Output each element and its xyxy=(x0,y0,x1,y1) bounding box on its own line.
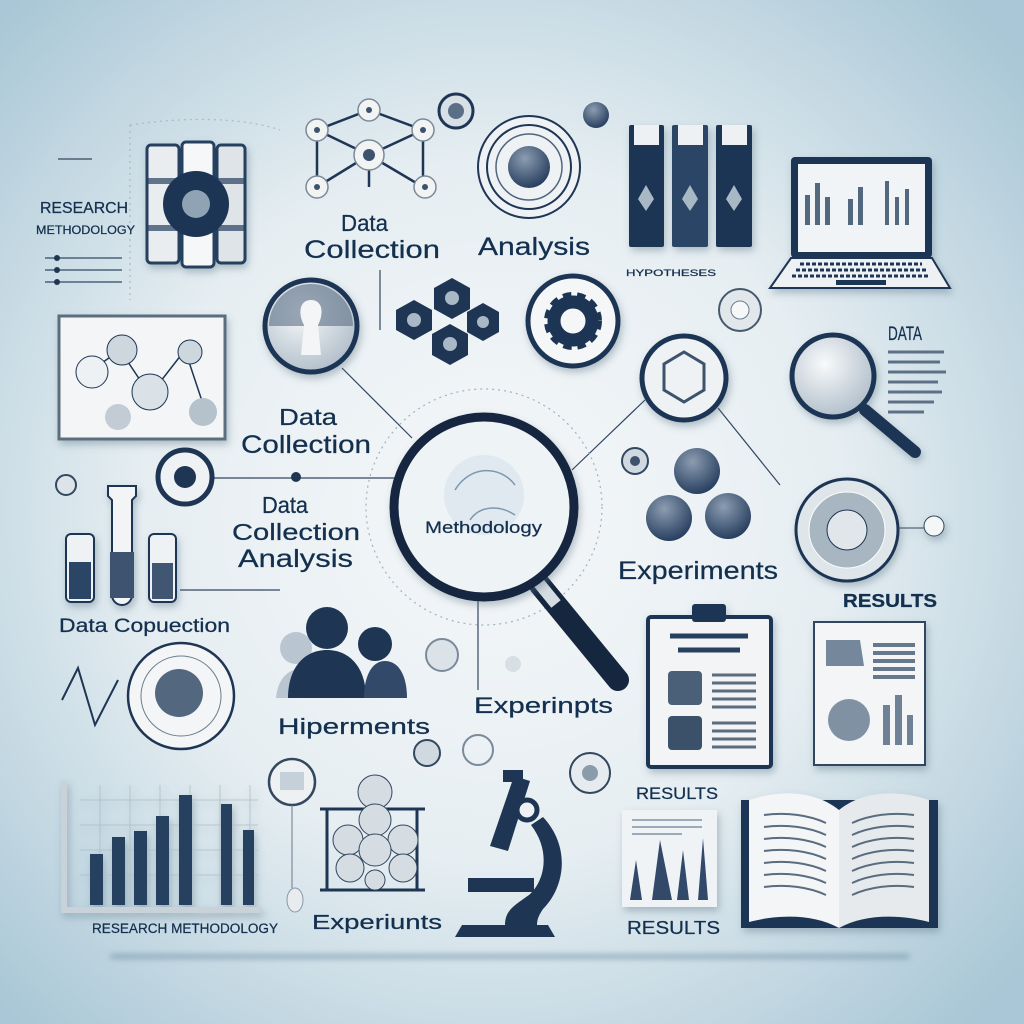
panel: process diagram xyxy=(59,316,225,439)
small badge xyxy=(719,289,761,331)
text block: data: DATA xyxy=(888,324,922,345)
small badge xyxy=(622,448,648,474)
icon: open book xyxy=(741,793,938,928)
label: data collection analysis: Collection xyxy=(232,519,360,545)
icon: disk xyxy=(796,479,944,581)
icon: cell circle with line xyxy=(62,643,234,749)
icon: test tubes xyxy=(66,486,176,605)
label: data collection 2 xyxy=(241,404,371,459)
label: data collection analysis xyxy=(232,492,360,573)
label: data collection: Data xyxy=(341,210,388,236)
label: results top: RESULTS xyxy=(843,591,937,611)
panel: results chart xyxy=(622,810,717,907)
connector lines xyxy=(130,119,780,690)
label: hiperments: Hiperments xyxy=(278,714,430,739)
small badges center xyxy=(414,639,521,766)
label: data collection: Collection xyxy=(304,236,440,264)
icon: puzzle cube xyxy=(147,142,245,267)
heading: research methodology: RESEARCH xyxy=(40,200,128,217)
label: experinpts: Experinpts xyxy=(474,693,613,718)
label: data collection xyxy=(304,210,440,264)
label: experiments: Experiments xyxy=(618,557,778,585)
icon: clipboard xyxy=(648,604,771,767)
icon: magnifying glass right xyxy=(792,335,915,452)
label: results bottom: RESULTS xyxy=(627,918,720,938)
badge right of microscope xyxy=(570,753,610,793)
heading: research methodology xyxy=(36,159,135,285)
bar chart xyxy=(64,781,262,910)
label: data copuection: Data Copuection xyxy=(59,616,230,637)
badges lower left xyxy=(269,759,315,912)
icon: magnifier small badge xyxy=(642,336,726,420)
label: data collection analysis: Data xyxy=(262,492,308,518)
label: data collection 2: Data xyxy=(279,404,337,430)
icon: large magnifying glass with Methodology xyxy=(394,417,618,680)
baseline shadow xyxy=(110,954,910,959)
icon: three spheres xyxy=(646,448,751,541)
label: experiments bottom: Experiunts xyxy=(312,912,442,934)
icon: target circle xyxy=(478,116,580,218)
caption: hypotheses: HYPOTHESES xyxy=(626,268,716,278)
icon: flower diagram xyxy=(320,775,425,890)
panel: report xyxy=(814,622,925,765)
icon: books xyxy=(629,125,752,247)
label: data collection 2: Collection xyxy=(241,431,371,459)
text block: data xyxy=(888,324,946,412)
caption: research methodology: RESEARCH METHODOLOGY xyxy=(92,921,278,936)
label: analysis: Analysis xyxy=(478,233,590,261)
icon: gear xyxy=(528,276,618,366)
icon: microscope xyxy=(455,770,562,937)
icon: people xyxy=(276,607,407,698)
icon: hexagon cluster xyxy=(396,278,499,365)
icon: badge lens xyxy=(265,280,357,372)
label: data collection analysis: Analysis xyxy=(238,545,353,573)
heading: research methodology: METHODOLOGY xyxy=(36,223,135,237)
icon: network xyxy=(306,99,436,198)
icon: large magnifying glass with Methodology: Methodology xyxy=(425,518,543,537)
small badges top xyxy=(439,94,609,128)
icon: laptop xyxy=(770,157,950,288)
label: results small: RESULTS xyxy=(636,784,718,803)
badge with arrows xyxy=(56,450,301,504)
